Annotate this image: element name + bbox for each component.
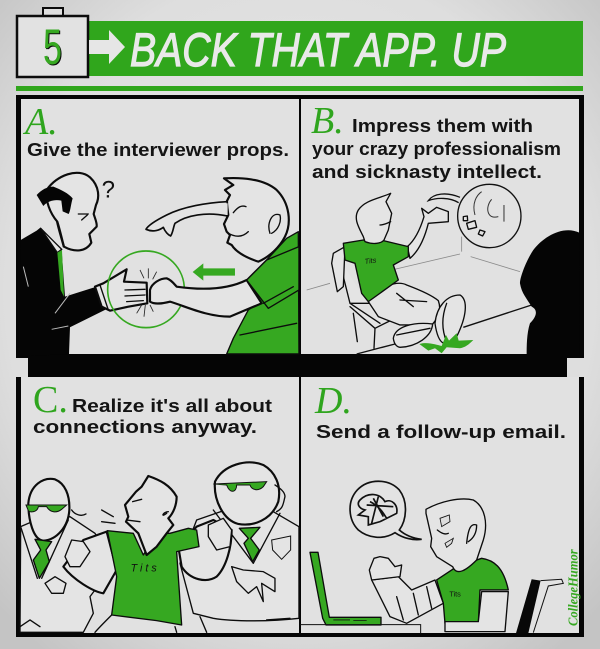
illustration: injured man at laptop (300, 481, 581, 633)
legs (368, 283, 440, 325)
text: caption C (33, 395, 272, 437)
text: caption B: and sicknasty intellect. (312, 161, 542, 182)
vomit (419, 333, 473, 353)
silhouette (520, 230, 580, 355)
head (356, 193, 392, 243)
text: caption B: your crazy professionalism (312, 138, 561, 159)
left guard (20, 479, 110, 632)
person: Tits (449, 590, 461, 599)
green banner (85, 21, 583, 76)
text: caption D: Send a follow-up email. (316, 421, 566, 442)
person (369, 499, 508, 632)
text: caption B: Impress them with (352, 115, 533, 136)
panel: A (18, 99, 299, 357)
thought bubble (428, 184, 521, 248)
laptop (300, 552, 421, 633)
comic frame (16, 95, 584, 637)
job seeker (146, 178, 299, 354)
illustration: security guards (20, 462, 299, 632)
hero (20, 476, 290, 632)
logo: CollegeHumor: CollegeHumor (566, 549, 581, 626)
body (332, 247, 345, 292)
right guard (180, 462, 299, 621)
underline rule (16, 86, 583, 91)
icon: briefcase with number 5: 5 (44, 20, 63, 76)
text: caption C: connections anyway. (33, 416, 257, 437)
illustration: feet on desk (307, 184, 580, 355)
panel: B (301, 99, 580, 355)
heading: A: A. (22, 101, 58, 143)
title: BACK THAT APP. UP (130, 23, 507, 76)
heading: C: C. (33, 379, 68, 421)
icon: briefcase with number 5 (17, 8, 88, 77)
speech bubble (350, 481, 422, 540)
circle (108, 251, 184, 328)
illustration: fist bump (18, 173, 299, 357)
shoes (393, 323, 433, 347)
interviewer: ? (102, 176, 115, 203)
hero: Tits (131, 563, 157, 575)
panel: D (300, 377, 581, 633)
header: title banner (16, 8, 583, 91)
text: caption B (312, 115, 561, 182)
arrow (89, 30, 125, 64)
icon: briefcase with number 5: 5 (43, 19, 62, 75)
chair (338, 257, 392, 348)
illustration: feet on desk: Tits (364, 255, 377, 266)
wheelchair (516, 579, 541, 633)
text: caption A: Give the interviewer props. (27, 139, 289, 160)
interviewer (18, 173, 115, 357)
hand (95, 269, 147, 311)
panel: C (20, 377, 299, 633)
text: caption C: Realize it's all about (72, 395, 272, 416)
heading: D: D. (314, 380, 352, 422)
arrow (193, 263, 235, 281)
heading: B: B. (311, 100, 344, 142)
